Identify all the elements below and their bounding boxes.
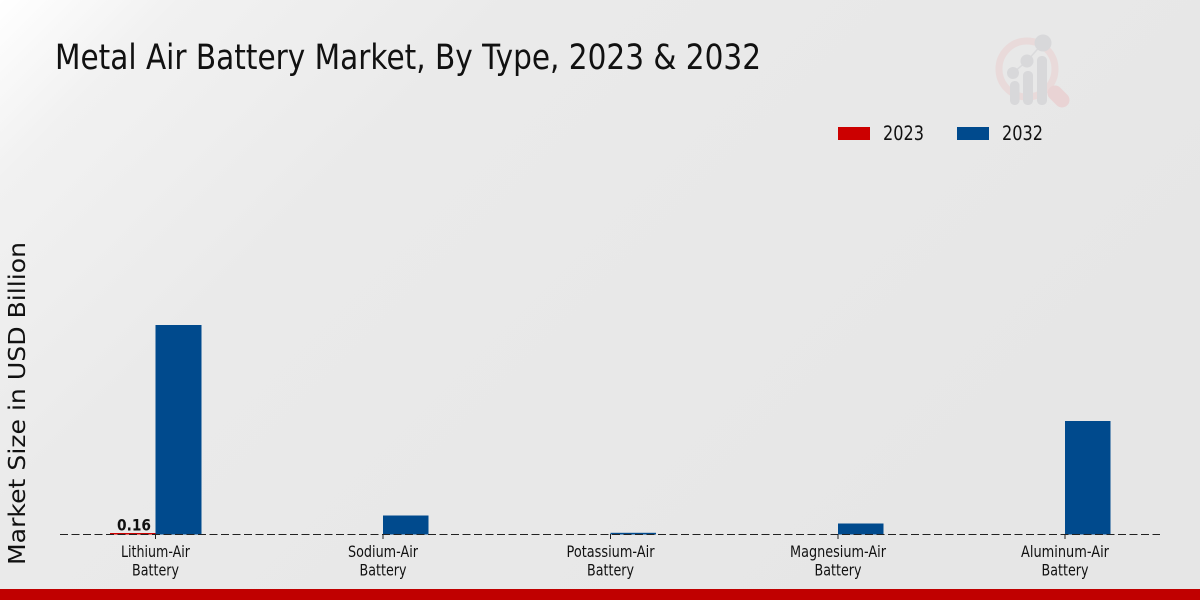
category label: Lithium-Air Battery: Lithium-Air xyxy=(121,542,190,561)
legend xyxy=(838,122,1043,145)
bar chart xyxy=(60,325,1160,539)
category label: Potassium-Air Battery: Potassium-Air xyxy=(566,542,655,561)
bar: Lithium-Air 2032 xyxy=(156,325,202,534)
legend swatch: 2032 xyxy=(957,127,989,140)
value label: 0.16 xyxy=(117,516,151,534)
icon: watermark magnifier logo xyxy=(999,34,1062,105)
category label: Lithium-Air Battery xyxy=(121,542,190,580)
legend label: 2023: 2023 xyxy=(883,122,924,145)
bar: Potassium-Air 2032 xyxy=(610,533,656,534)
category label: Aluminum-Air Battery: Battery xyxy=(1042,560,1088,580)
category label: Potassium-Air Battery: Battery xyxy=(587,560,634,580)
y axis title: Market Size in USD Billion xyxy=(3,242,31,565)
category label: Aluminum-Air Battery: Aluminum-Air xyxy=(1021,542,1109,561)
title: Metal Air Battery Market, By Type, 2023 & 2032 xyxy=(55,38,761,78)
axis ticks xyxy=(156,534,1065,539)
category label: Magnesium-Air Battery: Battery xyxy=(814,560,862,580)
bar: Aluminum-Air 2032 xyxy=(1065,421,1110,534)
category label: Magnesium-Air Battery: Magnesium-Air xyxy=(790,542,886,561)
category label: Sodium-Air Battery xyxy=(348,542,418,580)
footer bar xyxy=(0,589,1200,600)
category label: Magnesium-Air Battery xyxy=(790,542,886,580)
category label: Lithium-Air Battery: Battery xyxy=(132,560,179,580)
bar: Sodium-Air 2032 xyxy=(383,516,428,534)
x axis baseline xyxy=(60,534,1160,536)
legend swatch: 2023 xyxy=(838,127,870,140)
category label: Potassium-Air Battery xyxy=(566,542,655,580)
bar: Magnesium-Air 2032 xyxy=(838,524,884,534)
bar: Lithium-Air 2023 xyxy=(110,533,156,534)
category label: Aluminum-Air Battery xyxy=(1021,542,1109,580)
legend label: 2032: 2032 xyxy=(1002,122,1043,145)
category label: Sodium-Air Battery: Sodium-Air xyxy=(348,542,418,561)
category label: Sodium-Air Battery: Battery xyxy=(360,560,406,580)
